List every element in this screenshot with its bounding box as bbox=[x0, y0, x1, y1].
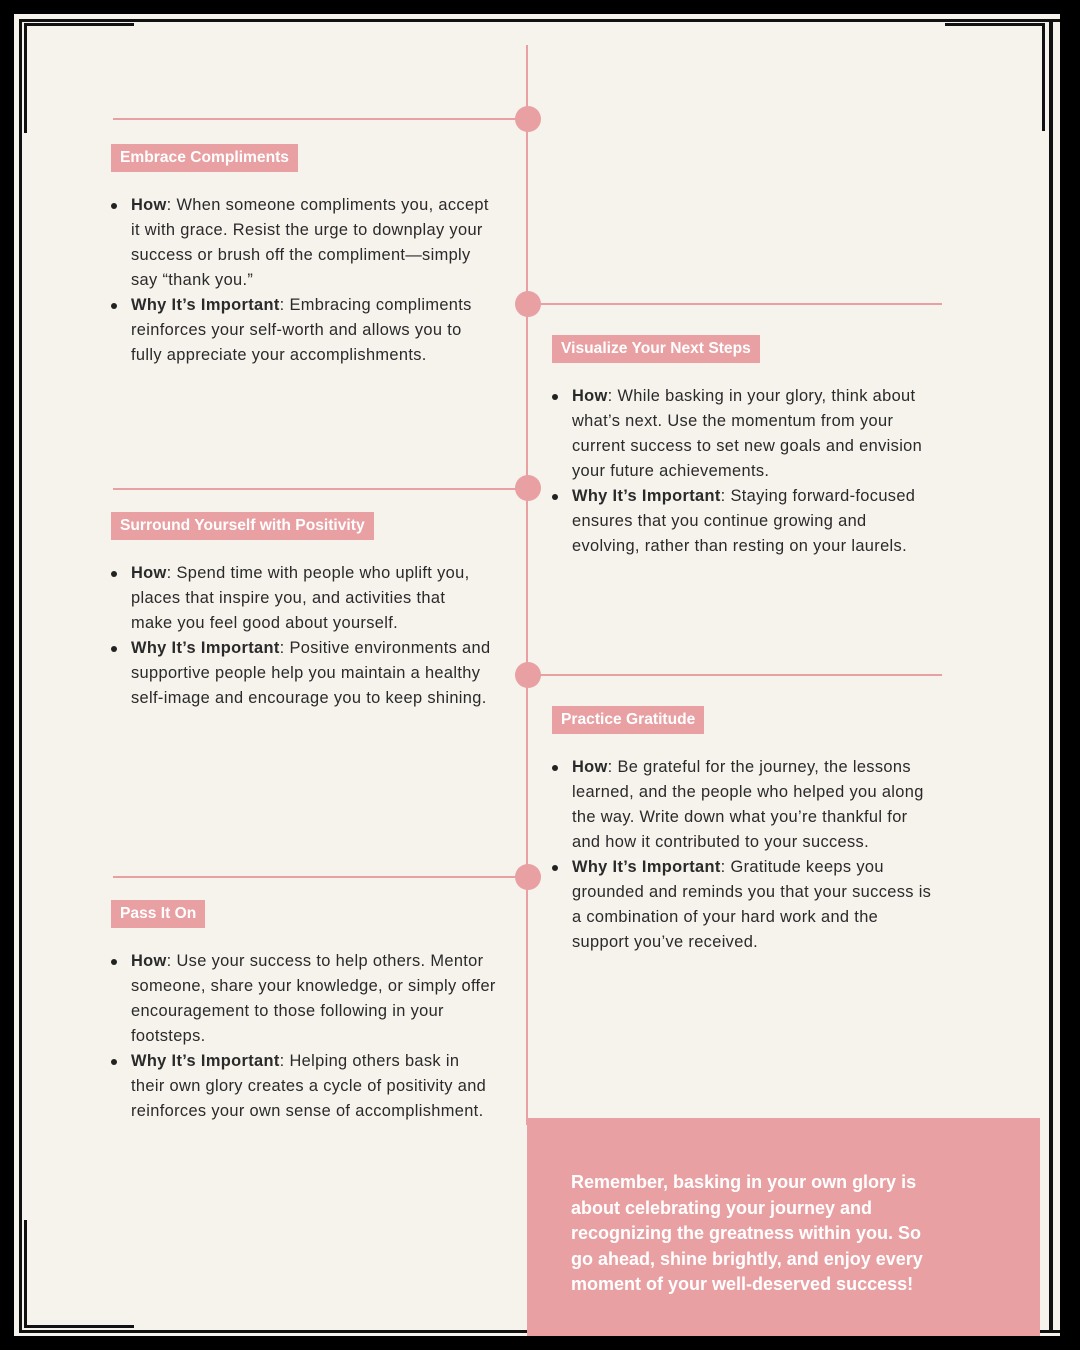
text: Surround: make you feel good about yourself. bbox=[131, 614, 398, 632]
timeline bbox=[526, 45, 528, 1125]
timeline dots bbox=[515, 106, 541, 890]
text: Surround: supportive people help you maintain a healthy bbox=[131, 664, 480, 682]
callout: closing message: moment of your well-deserved success! bbox=[571, 1274, 913, 1294]
text: Gratitude: learned, and the people who helped you along bbox=[572, 783, 924, 801]
label: Pass It On bbox=[111, 900, 205, 928]
label: Practice Gratitude bbox=[552, 706, 704, 734]
text: Surround: self-image and encourage you to keep shining. bbox=[131, 689, 487, 707]
text: Pass It On: encouragement to those following in your bbox=[131, 1002, 444, 1020]
text: Gratitude: the way. Write down what you’re thankful for bbox=[572, 808, 907, 826]
text: Surround: How: Spend time with people who uplift you, bbox=[131, 564, 470, 582]
text: Embrace Compliments: it with grace. Resist the urge to downplay your bbox=[131, 221, 483, 239]
text: Embrace Compliments: How: When someone compliments you, accept bbox=[131, 196, 489, 214]
text: Visualize: How: While basking in your glory, think about bbox=[572, 387, 915, 405]
text: Pass It On bbox=[111, 952, 496, 1120]
text: Embrace Compliments: success or brush off the compliment—simply bbox=[131, 246, 471, 264]
text: Gratitude: Why It’s Important: Gratitude keeps you bbox=[572, 858, 884, 876]
text: Gratitude: a combination of your hard work and the bbox=[572, 908, 878, 926]
text: Visualize: evolving, rather than resting on your laurels. bbox=[572, 537, 907, 555]
callout: closing message: Remember, basking in your own glory is bbox=[571, 1172, 916, 1192]
text: Pass It On: someone, share your knowledge, or simply offer bbox=[131, 977, 496, 995]
text: Embrace Compliments: reinforces your self-worth and allows you to bbox=[131, 321, 462, 339]
label: Surround Yourself with Positivity bbox=[111, 512, 374, 540]
label: Practice Gratitude: Practice Gratitude bbox=[561, 711, 695, 728]
text: Visualize: current success to set new goals and envision bbox=[572, 437, 922, 455]
text: Embrace Compliments: Why It’s Important: Embracing compliments bbox=[131, 296, 472, 314]
text: Gratitude: and how it contributed to your success. bbox=[572, 833, 869, 851]
text: Gratitude: grounded and reminds you that your success is bbox=[572, 883, 931, 901]
text: Pass It On: Why It’s Important: Helping others bask in bbox=[131, 1052, 459, 1070]
text: Surround: Why It’s Important: Positive environments and bbox=[131, 639, 490, 657]
label: Embrace Compliments: Embrace Compliments bbox=[120, 149, 289, 166]
text: Visualize: ensures that you continue growing and bbox=[572, 512, 867, 530]
callout: closing message: recognizing the greatness within you. So bbox=[571, 1223, 921, 1243]
callout: closing message: about celebrating your journey and bbox=[571, 1198, 872, 1218]
callout: closing message bbox=[527, 1118, 1040, 1336]
text: Visualize: your future achievements. bbox=[572, 462, 769, 480]
label: Visualize Your Next Steps bbox=[552, 335, 760, 363]
text: Surround: places that inspire you, and activities that bbox=[131, 589, 445, 607]
text: Visualize: what’s next. Use the momentum from your bbox=[572, 412, 893, 430]
text: Visualize bbox=[552, 387, 922, 555]
text: Pass It On: reinforces your own sense of accomplishment. bbox=[131, 1102, 483, 1120]
label: Visualize Your Next Steps: Visualize Your Next Steps bbox=[561, 340, 751, 357]
label: Embrace Compliments bbox=[111, 144, 298, 172]
text: Gratitude bbox=[552, 758, 931, 951]
label: Surround Yourself with Positivity: Surround Yourself with Positivity bbox=[120, 517, 365, 534]
label: Pass It On: Pass It On bbox=[120, 905, 196, 922]
text: Pass It On: footsteps. bbox=[131, 1027, 206, 1045]
text: Surround bbox=[111, 564, 490, 707]
text: Embrace Compliments: fully appreciate your accomplishments. bbox=[131, 346, 427, 364]
text: Embrace Compliments: say “thank you.” bbox=[131, 271, 253, 289]
text: Gratitude: support you’ve received. bbox=[572, 933, 758, 951]
text: Pass It On: How: Use your success to help others. Mentor bbox=[131, 952, 483, 970]
callout: closing message: go ahead, shine brightly, and enjoy every bbox=[571, 1248, 923, 1268]
text: Gratitude: How: Be grateful for the journey, the lessons bbox=[572, 758, 911, 776]
text: Pass It On: their own glory creates a cycle of positivity and bbox=[131, 1077, 486, 1095]
text: Embrace Compliments bbox=[111, 196, 489, 364]
text: Visualize: Why It’s Important: Staying forward-focused bbox=[572, 487, 915, 505]
